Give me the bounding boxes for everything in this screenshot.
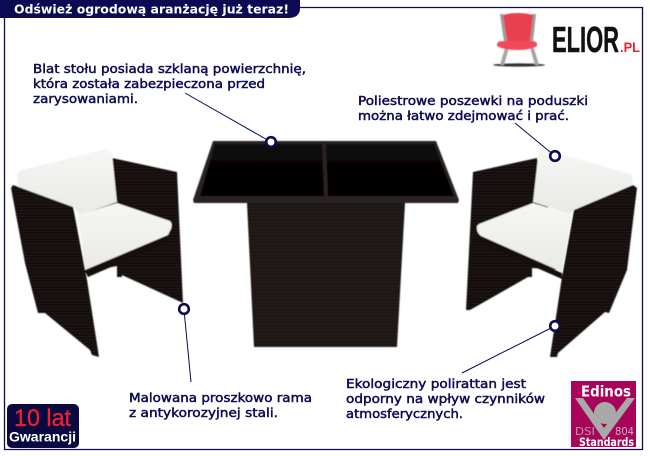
- callout: glass table top: [33, 62, 306, 147]
- callout: eco polyrattan: [346, 321, 560, 421]
- chair front panel: [550, 185, 637, 357]
- logo: Elior.pl: [493, 13, 640, 67]
- badge: Edinos standards: Standards: [579, 435, 634, 449]
- callout: glass table top: zarysowaniami.: [33, 92, 138, 106]
- callout: eco polyrattan: atmosferycznych.: [346, 407, 463, 421]
- badge: Edinos standards: [571, 381, 636, 449]
- chair back panel: [85, 158, 183, 303]
- callout: glass table top: która została zabezpieczona przed: [33, 77, 265, 91]
- table top frame: [193, 141, 459, 203]
- table: [193, 141, 459, 347]
- badge: Edinos standards: 804: [615, 425, 634, 438]
- left chair: [11, 149, 183, 357]
- callout: cushion covers: [358, 94, 588, 161]
- callout: glass table top: Blat stołu posiada szklaną powierzchnię,: [33, 62, 306, 76]
- back cushion: [533, 148, 633, 214]
- under-seat rail: [85, 236, 168, 277]
- logo: Elior.pl: .PL: [620, 39, 640, 55]
- icon: red chair: [493, 13, 545, 67]
- seat cushion: [477, 203, 572, 272]
- table base: [247, 203, 405, 347]
- badge: 10 years warranty: [7, 404, 79, 448]
- header banner: Odśwież ogrodową aranżację już teraz!: [14, 2, 289, 16]
- badge: Edinos standards: DSI: [575, 425, 595, 438]
- glass right: [326, 144, 454, 196]
- seat cushion: [78, 203, 172, 270]
- callout: cushion covers: można łatwo zdejmować i prać.: [358, 109, 569, 123]
- badge: Edinos standards: Edinos: [581, 382, 631, 400]
- glass left: [200, 144, 324, 196]
- badge: 10 years warranty: Gwarancji: [9, 428, 76, 444]
- back cushion: [17, 149, 117, 215]
- callout: powder-coated frame: z antykorozyjnej stali.: [129, 406, 278, 420]
- callout: eco polyrattan: odporny na wpływ czynników: [346, 392, 545, 406]
- right chair: [466, 148, 637, 357]
- callout: powder-coated frame: Malowana proszkowo rama: [129, 391, 312, 405]
- callout: eco polyrattan: Ekologiczny polirattan jest: [346, 377, 526, 391]
- callout: cushion covers: Poliestrowe poszewki na poduszki: [358, 94, 588, 108]
- callout: powder-coated frame: [129, 304, 312, 420]
- chair front panel: [11, 185, 99, 357]
- under-seat rail: [478, 236, 562, 279]
- chair back panel: [466, 158, 562, 310]
- badge: 10 years warranty: 10 lat: [14, 405, 71, 432]
